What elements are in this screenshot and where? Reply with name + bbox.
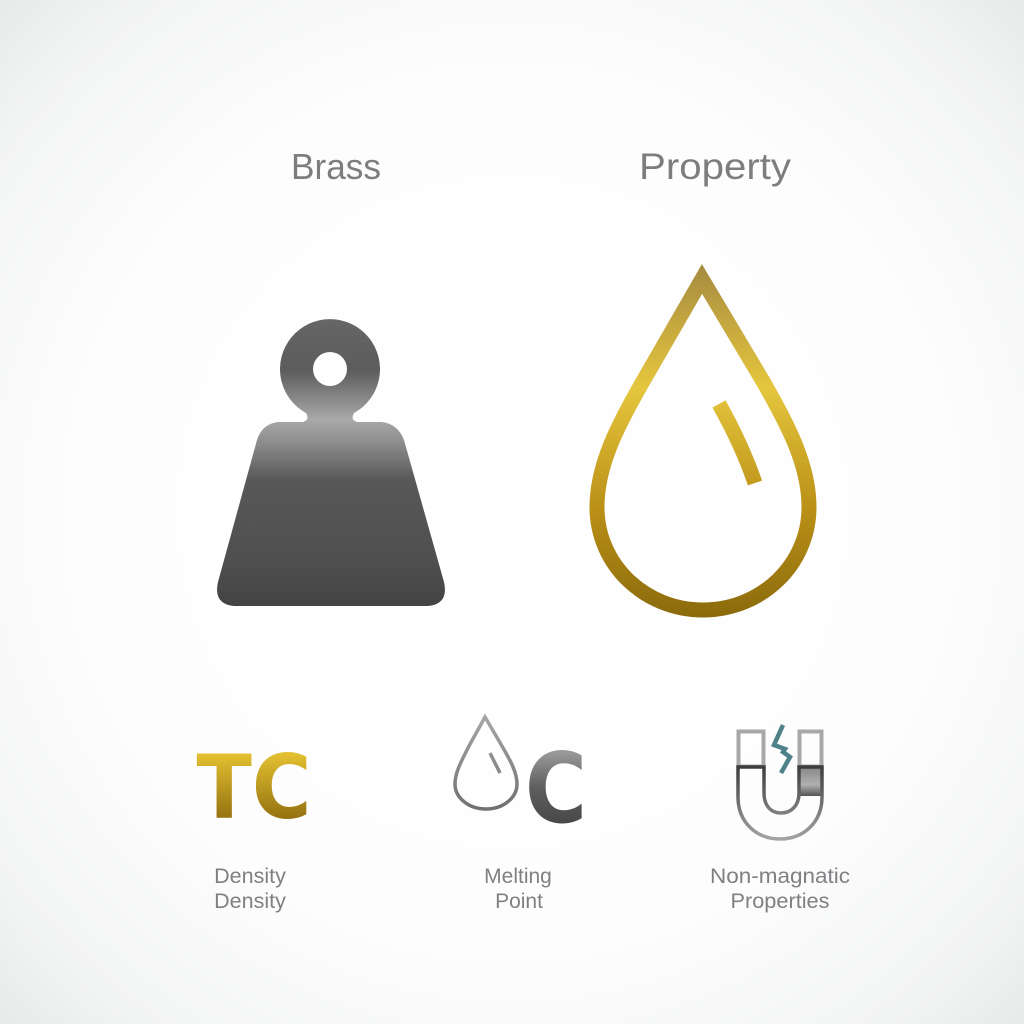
label: melting point: Point — [495, 890, 543, 913]
label: density: Density — [214, 889, 286, 913]
icon: large gold drop — [597, 279, 809, 610]
icon: small drop with C: C — [525, 732, 587, 845]
icon: small drop with C — [455, 717, 587, 845]
icon: TC density mark: TC — [196, 736, 312, 839]
label: melting point — [484, 865, 552, 913]
label: non-magnetic properties — [710, 865, 850, 913]
label: density — [214, 864, 286, 913]
heading: Property: Property — [639, 146, 792, 187]
icon: magnet with bolt — [738, 725, 822, 839]
icon: brass weight — [217, 319, 445, 606]
label: melting point: Melting — [484, 865, 552, 888]
label: non-magnetic properties: Non-magnatic — [710, 865, 850, 888]
label: density: Density — [214, 864, 286, 888]
label: non-magnetic properties: Properties — [730, 890, 830, 913]
heading: Brass: Brass — [291, 146, 381, 187]
